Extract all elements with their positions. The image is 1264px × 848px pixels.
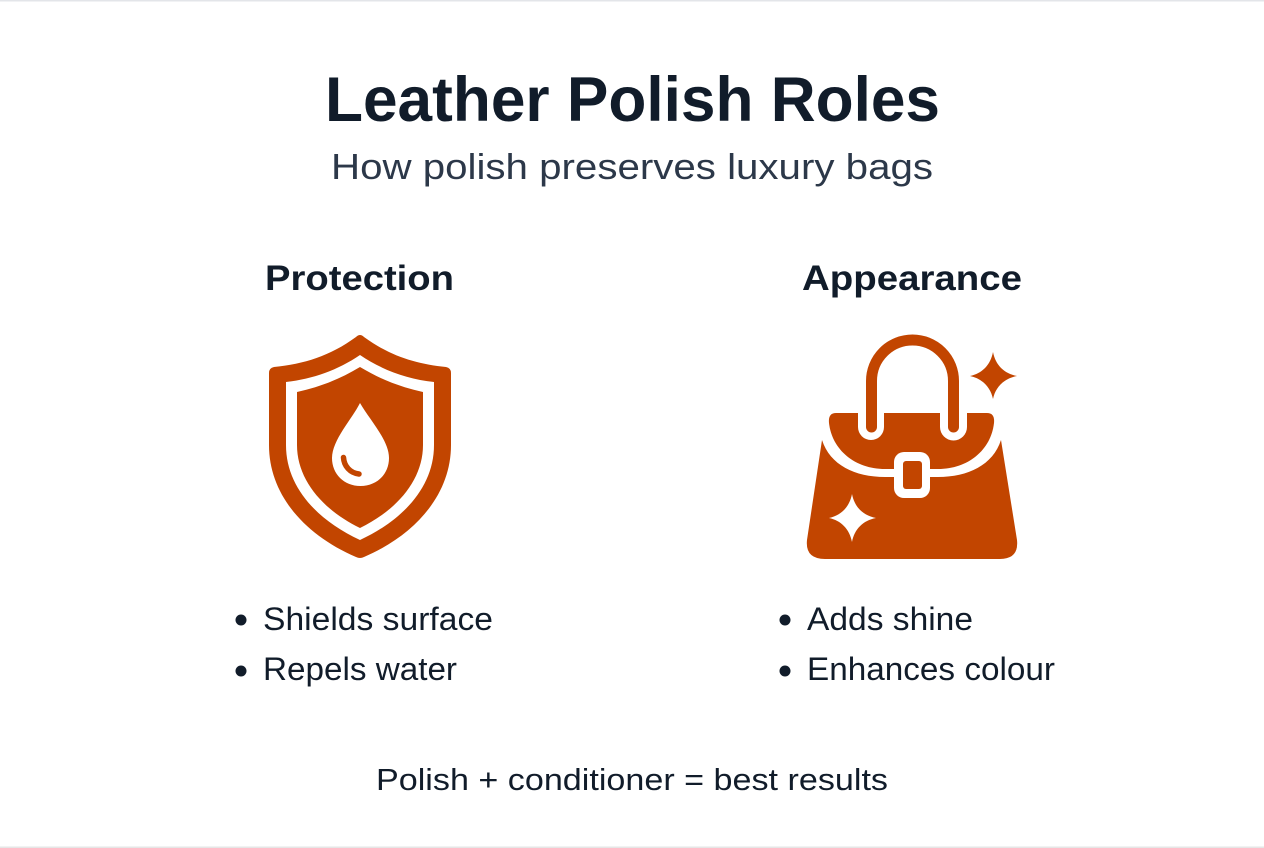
bullet list: protection: Shields surface <box>263 601 493 637</box>
bullet list: appearance <box>780 601 1055 687</box>
panel: appearance <box>780 259 1055 687</box>
bullet list: protection: Repels water <box>263 651 457 687</box>
panel: protection <box>236 259 493 687</box>
icon: shield with water drop <box>269 335 451 558</box>
bullet list: appearance: Adds shine <box>807 601 973 637</box>
icon: handbag with sparkles <box>807 340 1017 559</box>
heading: protection: Protection <box>265 259 454 298</box>
heading: appearance: Appearance <box>802 259 1022 298</box>
subtitle: How polish preserves luxury bags <box>331 146 933 187</box>
title: Leather Polish Roles <box>325 65 940 135</box>
bullet list: appearance: Enhances colour <box>807 651 1055 687</box>
footer note: Polish + conditioner = best results <box>376 762 888 797</box>
bullet list: protection <box>236 601 493 687</box>
